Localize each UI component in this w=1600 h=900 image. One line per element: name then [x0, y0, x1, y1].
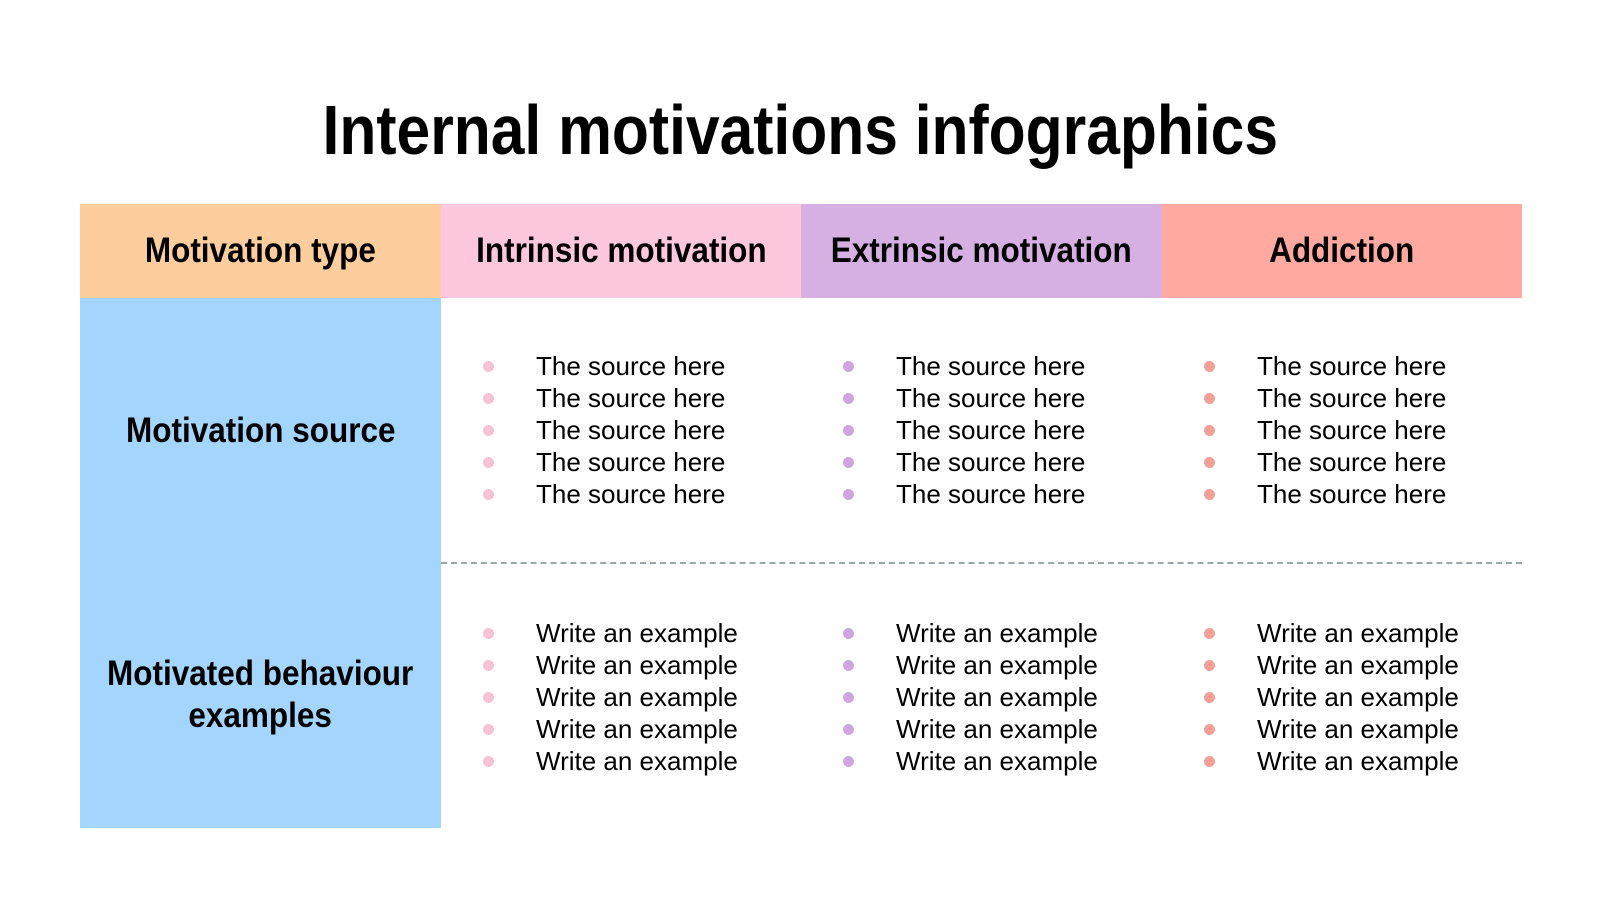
list: extrinsic examples: Write an example — [896, 682, 1098, 712]
list: extrinsic sources: The source here — [896, 447, 1085, 477]
header: motivation type: Motivation type — [145, 231, 376, 270]
list: intrinsic examples: Write an example — [536, 714, 738, 744]
list: extrinsic examples: Write an example — [896, 618, 1098, 648]
header: intrinsic motivation: Intrinsic motivation — [476, 231, 766, 270]
list: intrinsic sources: The source here — [536, 479, 725, 509]
list: addiction examples — [1204, 618, 1459, 776]
list: extrinsic examples: Write an example — [896, 746, 1098, 776]
list: extrinsic examples: Write an example — [896, 650, 1098, 680]
list: intrinsic sources: The source here — [536, 383, 725, 413]
list: addiction examples: Write an example — [1257, 618, 1459, 648]
header: addiction — [1162, 204, 1522, 298]
list: extrinsic sources: The source here — [896, 351, 1085, 381]
list: addiction examples: Write an example — [1257, 650, 1459, 680]
side column — [80, 298, 441, 828]
list: intrinsic examples: Write an example — [536, 618, 738, 648]
list: extrinsic sources: The source here — [896, 383, 1085, 413]
list: addiction sources: The source here — [1257, 351, 1446, 381]
row label: motivated behaviour examples: examples — [189, 696, 332, 735]
list: intrinsic sources: The source here — [536, 415, 725, 445]
list: addiction sources: The source here — [1257, 383, 1446, 413]
row label: motivation source: Motivation source — [126, 411, 395, 450]
row label: motivated behaviour examples: Motivated behaviour — [107, 654, 414, 693]
list: extrinsic sources: The source here — [896, 415, 1085, 445]
list: addiction sources: The source here — [1257, 415, 1446, 445]
header: addiction: Addiction — [1269, 231, 1415, 270]
header: motivation type — [80, 204, 441, 298]
list: extrinsic examples — [843, 618, 1098, 776]
header: extrinsic motivation — [801, 204, 1162, 298]
list: intrinsic sources: The source here — [536, 447, 725, 477]
list: intrinsic examples: Write an example — [536, 746, 738, 776]
list: intrinsic sources — [483, 351, 725, 509]
list: extrinsic sources: The source here — [896, 479, 1085, 509]
list: extrinsic sources — [843, 351, 1085, 509]
header row — [80, 204, 1522, 298]
list: addiction sources: The source here — [1257, 479, 1446, 509]
list: intrinsic examples: Write an example — [536, 650, 738, 680]
title: Internal motivations infographics — [322, 91, 1278, 169]
list: addiction examples: Write an example — [1257, 746, 1459, 776]
list: intrinsic sources: The source here — [536, 351, 725, 381]
list: addiction examples: Write an example — [1257, 682, 1459, 712]
list: intrinsic examples — [483, 618, 738, 776]
header: extrinsic motivation: Extrinsic motivation — [831, 231, 1132, 270]
list: addiction sources — [1204, 351, 1446, 509]
list: intrinsic examples: Write an example — [536, 682, 738, 712]
row label: motivated behaviour examples — [107, 654, 414, 735]
list: extrinsic examples: Write an example — [896, 714, 1098, 744]
list: addiction examples: Write an example — [1257, 714, 1459, 744]
header: intrinsic motivation — [441, 204, 801, 298]
list: addiction sources: The source here — [1257, 447, 1446, 477]
